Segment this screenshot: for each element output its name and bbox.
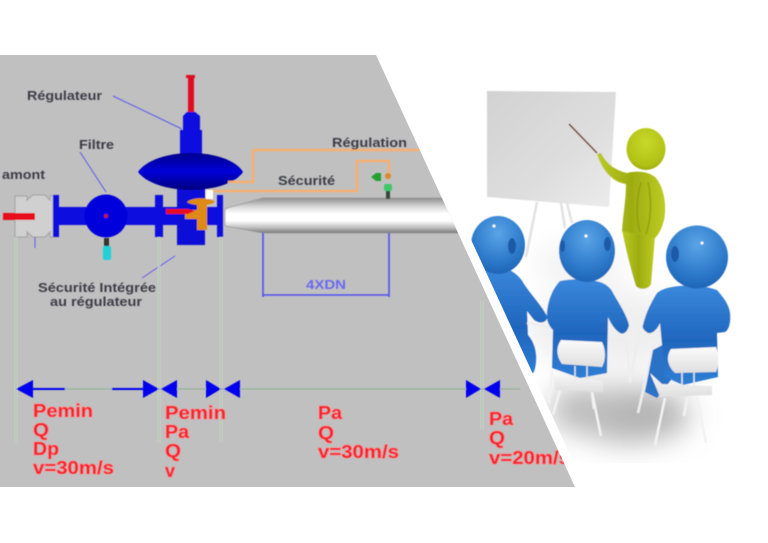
schematic drawing [2,75,570,481]
panel: training scene [470,91,730,445]
red parameters, section 2: Q [165,441,181,461]
extension lines core [16,237,520,443]
regulation impulse line [228,150,420,182]
filter centre dot [104,214,108,218]
red parameters, section 4 [488,411,565,466]
green presenter [597,128,666,289]
red parameters, section 2: Pa [165,422,190,442]
panel: regulator schematic [0,55,600,487]
presenter legs [622,230,655,289]
red parameters, section 1: Dp [33,439,59,459]
red parameters, section 4: Pa [489,409,514,429]
leader lines, blue [35,96,182,278]
highlight [492,224,496,228]
ear [508,238,516,254]
ears [560,237,611,252]
red parameters, section 1 [33,401,114,478]
presenter head [626,128,666,170]
red parameters, section 2 [165,403,226,481]
safety valve, orange [185,198,215,230]
audience member middle [547,220,629,378]
audience member right [643,226,730,398]
scene artwork [470,91,730,445]
chair back right [668,347,718,373]
head [471,216,525,274]
presenter fold lines [637,182,650,234]
green arrow [371,173,381,181]
grey background [0,55,600,487]
highlight [700,242,704,244]
label: Sécurité Intégrée au régulateur [38,281,156,309]
audience member left [470,216,547,378]
head [559,220,615,282]
label: Filtre: Filtre [79,138,114,152]
leg [645,342,674,398]
label: Régulateur: Régulateur [27,89,102,103]
body [643,286,730,385]
regulator neck [180,112,202,155]
4XDN dimension: 4XDN [306,278,346,292]
chair back struts middle [575,366,587,382]
head [666,226,728,288]
safety impulse line [206,161,389,191]
inlet red arrow [3,213,35,220]
red parameters, section 2: v [165,461,175,481]
chair legs right [655,397,706,445]
presentation board [487,91,616,207]
red parameters, section 3 [318,403,399,462]
red parameters, section 3: Q [318,423,334,443]
red parameters, section 4: v=20m/s [489,448,570,468]
filter body [84,194,128,238]
tap marker orange [385,173,391,179]
red parameters, section 3: v=30m/s [318,442,399,462]
presenter torso and arm [597,153,665,238]
regulator stem [186,75,195,112]
main blue pipe and flanges [53,195,223,237]
chair seat middle [553,372,603,392]
red parameters, section 1: Q [33,420,49,440]
presentation board legs [526,202,572,257]
floor shadows [525,243,695,443]
red parameters, section 3: Pa [318,403,343,423]
pressure tap [386,190,390,199]
drain valve [103,246,111,260]
body [470,266,547,378]
filter drain [104,238,109,246]
dimension arrows [16,380,500,398]
chair legs middle [549,370,601,436]
pointer [569,124,597,153]
table and rear legs [527,323,653,413]
label: Sécurité Intégrée au régulateur: au régulateur [50,295,142,309]
chair back middle [557,340,605,367]
red parameters, section 2: Pemin [165,403,226,423]
red parameters, section 1: v=30m/s [33,458,114,478]
label: amont: amont [2,168,46,182]
red parameters, section 1: Pemin [33,401,93,421]
downstream pipe with reducer [225,198,470,233]
label: Sécurité Intégrée au régulateur: Sécurité Intégrée [38,281,156,295]
highlight [584,234,588,238]
4XDN dimension [263,233,389,297]
extension lines [16,237,482,443]
label: Régulation: Régulation [332,136,407,150]
chair back struts right [682,372,694,388]
upstream grey valve [15,195,53,237]
chair seat right [650,373,712,397]
ear [671,246,679,262]
red parameters, section 4: Q [489,428,505,448]
red safety rod [166,209,195,214]
white connector [206,190,213,199]
label: Sécurité: Sécurité [278,174,335,188]
body [547,279,629,378]
tap marker green [384,184,392,191]
regulator lower body [177,188,205,245]
diaphragm [138,153,243,190]
